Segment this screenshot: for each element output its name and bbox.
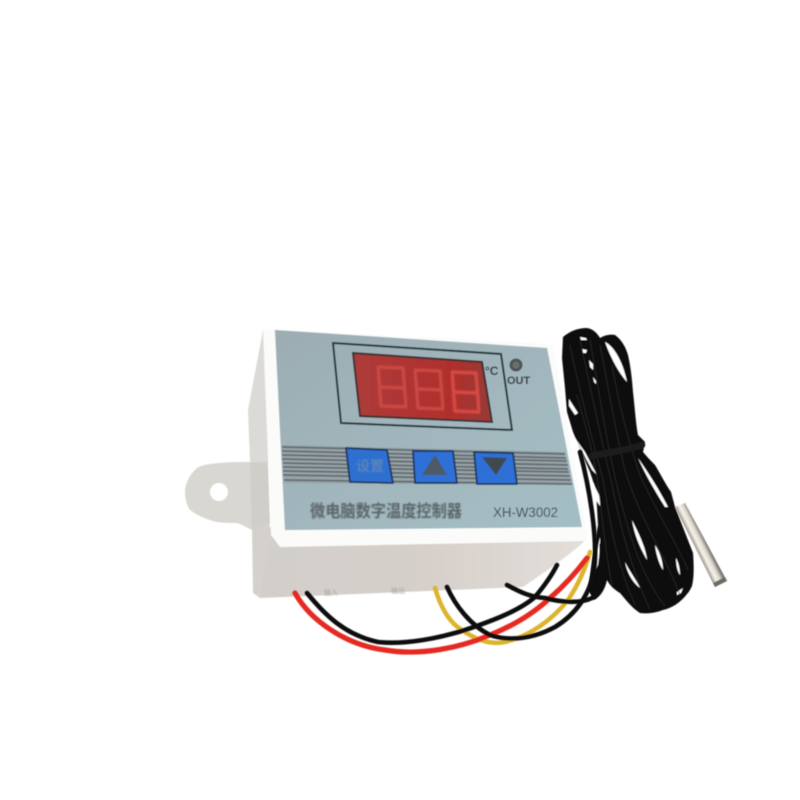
down button	[474, 452, 517, 484]
temperature sensor cable bundle	[562, 328, 694, 613]
stainless steel temperature probe	[675, 503, 727, 587]
red wire	[295, 558, 587, 652]
red LED display	[353, 353, 492, 422]
digit 1	[378, 367, 406, 407]
terminal labels on bottom wall: 输入	[324, 588, 338, 597]
model number: XH-W3002	[493, 504, 558, 520]
black wire to sensor	[447, 452, 595, 638]
striped band	[282, 445, 572, 485]
mounting ear with hole	[185, 460, 270, 530]
left side wall	[248, 330, 272, 462]
front label panel	[275, 330, 582, 530]
terminal labels on bottom wall: 输出	[391, 586, 405, 595]
degree celsius label: °C	[485, 364, 499, 378]
cable tie band	[592, 445, 642, 456]
controller body	[248, 329, 587, 598]
OUT label: OUT	[507, 375, 530, 387]
terminal labels on bottom wall	[324, 586, 405, 597]
second black wire to sensor	[507, 545, 603, 602]
connection wires	[295, 452, 603, 652]
bottom wall	[260, 537, 587, 598]
yellow wire	[435, 552, 590, 643]
white gaps between cable loops	[569, 337, 683, 595]
up button	[413, 451, 457, 483]
output LED	[510, 358, 522, 372]
display frame	[333, 343, 512, 430]
digit 2	[415, 370, 443, 409]
cable strand highlights	[570, 340, 688, 610]
set button: 设置	[356, 458, 384, 474]
set button	[346, 448, 393, 483]
black wire	[307, 565, 557, 643]
white bezel	[263, 329, 587, 547]
product name: 微电脑数字温度控制器	[310, 501, 462, 521]
digit 3	[452, 372, 479, 412]
